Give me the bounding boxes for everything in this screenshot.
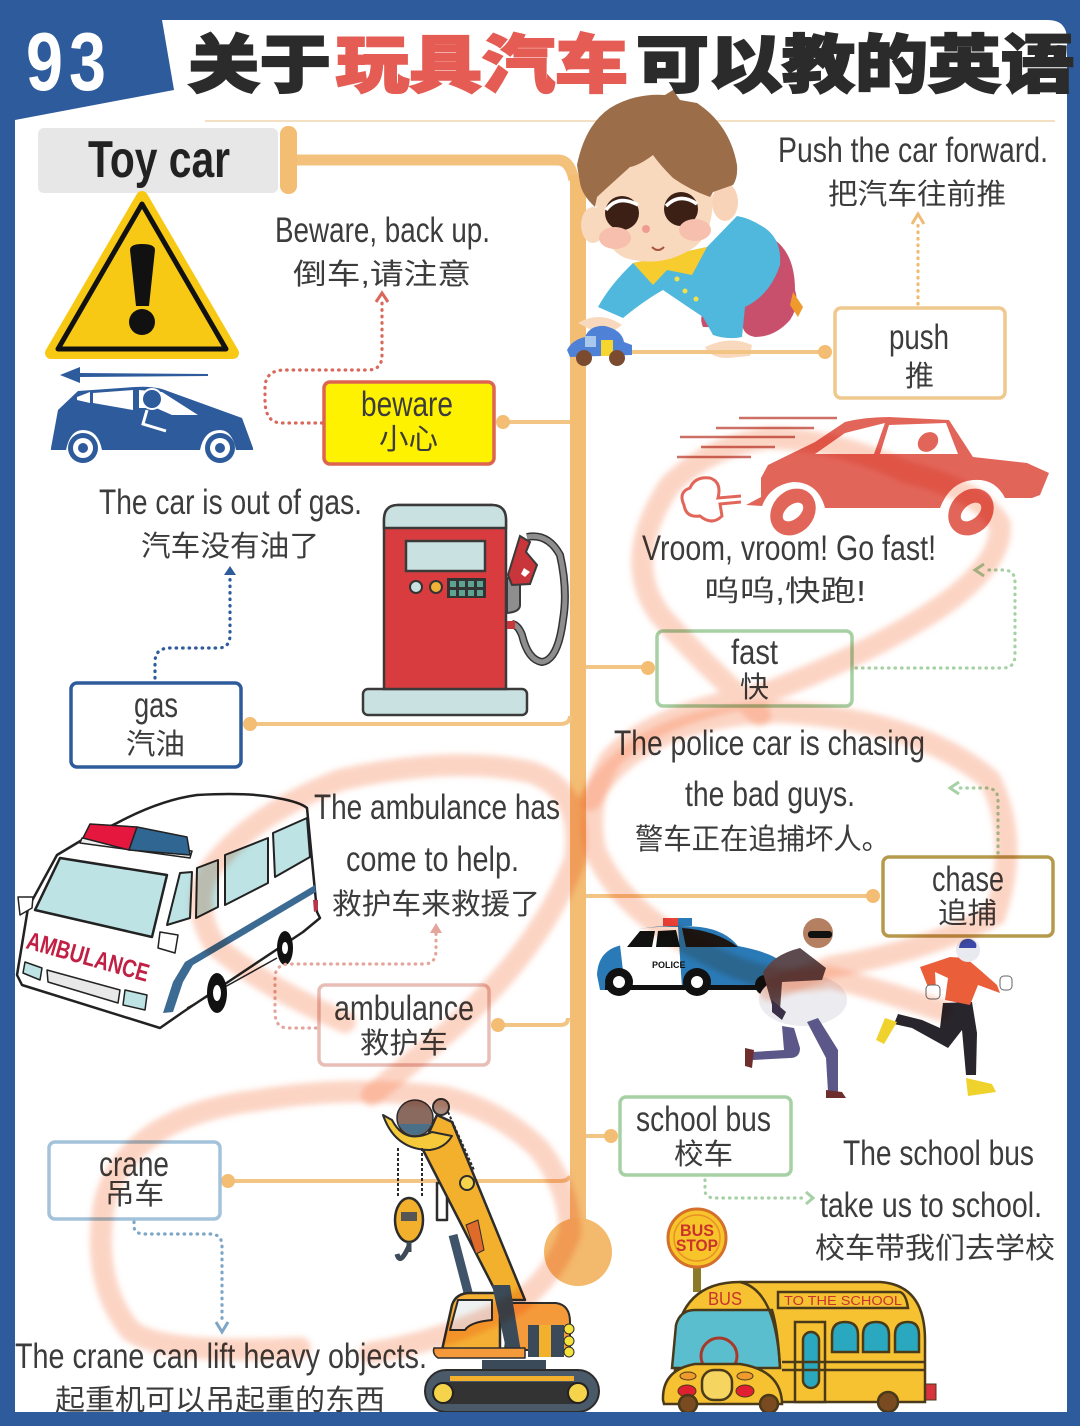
box: fast: fast: [731, 633, 778, 672]
badge: lesson number 93: 9: [26, 15, 63, 108]
box: gas: gas: [134, 686, 178, 725]
branch: beware connector: [496, 415, 570, 429]
icon: bus stop sign: STOP: [676, 1236, 718, 1255]
icon: red car with speed lines: [677, 417, 1049, 545]
text: push sentence: [778, 131, 1048, 211]
arrow: chase to sentence: [950, 782, 998, 853]
text: school bus sentence: 校车带我们去学校: [815, 1232, 1055, 1265]
branch: gas connector: [243, 716, 570, 731]
text: chase sentence: 警车正在追捕坏人。: [635, 823, 890, 856]
branch: school bus connector: [586, 1129, 618, 1143]
title: 关于: [188, 15, 331, 106]
box: chase: 追捕: [938, 897, 997, 930]
icon: blue car reversing: [51, 367, 253, 463]
text: crane sentence: 起重机可以吊起重的东西: [55, 1384, 385, 1417]
arrow: push to sentence: [912, 214, 924, 304]
text: ambulance sentence: come to help.: [346, 840, 519, 879]
branch: ambulance connector: [491, 1018, 568, 1032]
text: chase sentence: the bad guys.: [685, 775, 855, 814]
heading chip: Toy car: [38, 128, 278, 193]
text: fast sentence: 呜呜,快跑!: [704, 575, 866, 608]
icon: crawling boy with toy car: [567, 90, 803, 366]
text: chase sentence: The police car is chasing: [614, 724, 925, 763]
box: ambulance: 救护车: [360, 1027, 448, 1060]
title: 玩具汽车: [336, 15, 628, 106]
text: ambulance sentence: 救护车来救援了: [332, 888, 540, 921]
box: school bus: school bus: [636, 1100, 771, 1139]
arrow: fast to sentence: [856, 564, 1015, 668]
badge: lesson number 93: 3: [69, 15, 106, 108]
highlight scribbles: [101, 438, 1006, 1353]
text: school bus sentence: [815, 1134, 1055, 1265]
branch: chase connector: [586, 889, 880, 903]
text: beware sentence: Beware, back up.: [275, 211, 490, 250]
text: crane sentence: The crane can lift heavy objects.: [15, 1337, 427, 1376]
text: crane sentence: [15, 1337, 427, 1417]
icon: bus stop sign: BUS: [680, 1221, 714, 1240]
arrow: gas to sentence: [155, 566, 236, 678]
icon: gas pump: [363, 505, 565, 715]
icon: police car: [597, 918, 785, 996]
box: chase: chase: [932, 860, 1004, 899]
text: ambulance sentence: [314, 788, 560, 921]
box: crane: 吊车: [105, 1178, 164, 1211]
frame: bottom band: [0, 1412, 1080, 1426]
timeline trunk: [280, 126, 612, 1286]
title: [188, 15, 1074, 106]
text: out of gas sentence: [99, 483, 362, 563]
arrow: crane to sentence: [134, 1222, 228, 1332]
arrow: school bus to sentence: [705, 1180, 813, 1204]
box: push: 推: [905, 360, 934, 393]
arrow: beware to sentence: [265, 293, 388, 423]
text: out of gas sentence: The car is out of gas.: [99, 483, 362, 522]
box: ambulance: ambulance: [334, 989, 474, 1028]
box: beware: [324, 382, 494, 464]
text: ambulance sentence: The ambulance has: [314, 788, 560, 827]
text: fast sentence: Vroom, vroom! Go fast!: [642, 529, 936, 568]
box: push: [835, 308, 1005, 398]
box: fast: [657, 631, 852, 706]
heading chip: Toy car: Toy car: [88, 131, 230, 189]
icon: ambulance: [17, 794, 320, 1028]
text: beware sentence: 倒车,请注意: [293, 258, 471, 291]
box: gas: [71, 683, 241, 767]
text: fast sentence: [642, 529, 936, 608]
box: beware: beware: [361, 385, 453, 424]
icon: crane: [383, 1099, 599, 1412]
branch: push connector: [632, 345, 832, 359]
icon: bus stop sign: [668, 1209, 726, 1292]
icon: school bus: TO THE SCHOOL: [784, 1293, 902, 1308]
icon: warning triangle: [51, 197, 233, 353]
box: chase: [883, 857, 1053, 936]
branch: fast connector: [586, 661, 655, 675]
box: fast: 快: [740, 671, 769, 704]
badge: lesson number 93: [26, 15, 106, 108]
box: school bus: 校车: [674, 1138, 733, 1171]
icon: runner in orange hoodie: [876, 938, 1012, 1096]
icon: school bus: [663, 1282, 936, 1413]
text: out of gas sentence: 汽车没有油了: [141, 530, 319, 563]
text: beware sentence: [275, 211, 490, 291]
icon: thief running with sack: [745, 918, 847, 1098]
box: school bus: [620, 1097, 791, 1175]
box: beware: 小心: [379, 424, 438, 456]
box: ambulance: [319, 985, 489, 1065]
icon: school bus: BUS: [708, 1289, 742, 1309]
icon: ambulance: AMBULANCE: [23, 927, 152, 988]
title: 可以教的英语: [636, 15, 1074, 106]
text: school bus sentence: The school bus: [843, 1134, 1034, 1173]
icon: police car: POLICE: [652, 960, 686, 970]
text: push sentence: 把汽车往前推: [828, 178, 1006, 211]
box: crane: [49, 1142, 220, 1219]
box: crane: crane: [99, 1145, 169, 1184]
branch: crane connector: [221, 1174, 570, 1188]
text: chase sentence: [614, 724, 925, 856]
box: push: push: [889, 318, 949, 357]
box: gas: 汽油: [126, 728, 185, 761]
arrow: ambulance to sentence: [275, 923, 442, 1028]
